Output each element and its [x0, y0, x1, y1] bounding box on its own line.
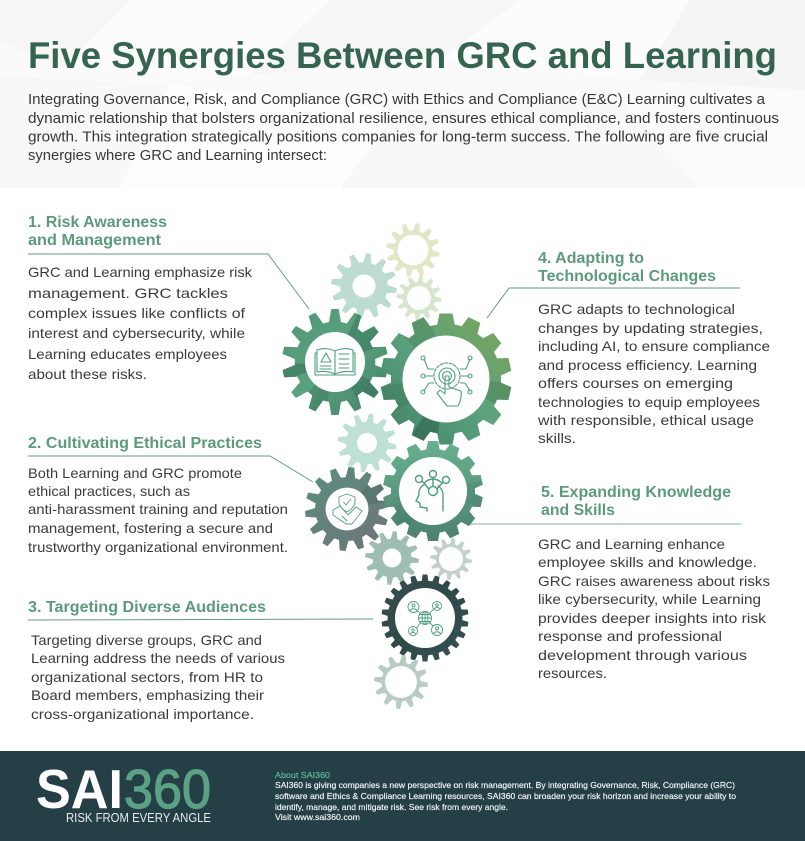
heading 1: and Management	[28, 232, 161, 249]
body 5: GRC and Learning enhance	[538, 536, 725, 552]
body 3: Targeting diverse groups, GRC and	[31, 632, 262, 648]
heading 2: 2. Cultivating Ethical Practices	[28, 435, 262, 452]
body 1: GRC and Learning emphasize risk	[28, 264, 253, 280]
body 4: technologies to equip employees	[538, 394, 760, 410]
body 2: management, fostering a secure and	[28, 520, 273, 536]
heading 5: 5. Expanding Knowledge	[541, 484, 731, 501]
body 5: provides deeper insights into risk	[538, 610, 767, 626]
heading 4: 4. Adapting to	[538, 250, 644, 267]
body 1: complex issues like conflicts of	[28, 305, 245, 321]
body 2: ethical practices, such as	[28, 483, 190, 499]
about text: Visit www.sai360.com	[275, 813, 360, 822]
about text: About SAI360	[275, 771, 330, 780]
body 2: trustworthy organizational environment.	[28, 539, 288, 555]
connector 2	[28, 456, 313, 482]
logo: RISK FROM EVERY ANGLE	[66, 811, 211, 825]
body 5	[538, 536, 770, 681]
panel: 1 risk awareness	[28, 214, 309, 382]
connector 3	[28, 619, 373, 620]
icon: head with network	[416, 470, 450, 511]
connector 1	[28, 254, 309, 309]
intro text: Integrating Governance, Risk, and Compliance (GRC) with Ethics and Compliance (E&C) Learning cultivates a	[28, 92, 766, 108]
gear: pale green small	[396, 276, 442, 320]
gear: pale teal middle	[338, 414, 396, 472]
body 1: about these risks.	[28, 366, 147, 382]
heading 4: Technological Changes	[538, 268, 716, 285]
body 3: cross-organizational importance.	[31, 706, 254, 722]
gear: pale yellow top	[386, 223, 440, 277]
gear: bottom pale	[374, 655, 428, 709]
title: Five Synergies Between GRC and Learning	[28, 35, 777, 76]
body 1: interest and cybersecurity, while	[28, 325, 245, 341]
body 3: Board members, emphasizing their	[31, 687, 264, 703]
body 3	[31, 632, 285, 722]
gear: head	[383, 441, 483, 541]
gear cluster	[277, 216, 518, 715]
body 5: development through various	[538, 647, 747, 663]
body 4: GRC adapts to technological	[538, 301, 735, 317]
body 4: and process efficiency. Learning	[538, 357, 757, 373]
logo: 360	[124, 758, 211, 820]
heading 5: and Skills	[541, 502, 615, 519]
gear: dark network	[382, 574, 468, 662]
intro text: growth. This integration strategically positions companies for long-term success. The following are five crucial	[28, 130, 768, 146]
gear: pale teal top	[331, 253, 397, 319]
connector 5	[469, 523, 741, 525]
about text: identify, manage, and mitigate risk. See risk from every angle.	[275, 803, 508, 812]
gear: book	[282, 309, 388, 415]
body 3: Learning address the needs of various	[31, 650, 285, 666]
heading 4	[538, 250, 716, 285]
heading 3: 3. Targeting Diverse Audiences	[28, 599, 266, 616]
gear: light grey	[430, 538, 472, 580]
icon: book with warning	[315, 349, 355, 375]
body 5: like cybersecurity, while Learning	[538, 591, 761, 607]
body 3: organizational sectors, from HR to	[31, 669, 263, 685]
body 5: response and professional	[538, 628, 722, 644]
body 4	[537, 301, 770, 446]
body 1	[28, 264, 253, 382]
body 2	[28, 465, 288, 555]
gear: shield handshake	[305, 467, 389, 551]
heading 5	[541, 484, 731, 519]
body 4: changes by updating strategies,	[538, 320, 763, 336]
body 4: skills.	[538, 430, 576, 446]
intro text: dynamic relationship that bolsters organizational resilience, ensures ethical compliance, and fosters continuous	[28, 111, 779, 127]
header background	[0, 0, 805, 188]
about text	[275, 771, 736, 822]
intro text	[28, 92, 779, 164]
about text: SAI360 is giving companies a new perspective on risk management. By integrating Governance, Risk, Compliance (GRC)	[275, 781, 735, 790]
gear: technology	[380, 314, 512, 444]
intro text: synergies where GRC and Learning intersect:	[28, 148, 327, 164]
body 4: with responsible, ethical usage	[537, 412, 754, 428]
panel: 2 ethical practices	[28, 435, 313, 555]
icon: global network of people	[408, 602, 442, 636]
body 1: Learning educates employees	[28, 346, 227, 362]
gear: mid grey-green	[365, 531, 419, 585]
body 2: Both Learning and GRC promote	[28, 465, 242, 481]
panel: 5 knowledge and skills	[469, 484, 770, 681]
heading 1: 1. Risk Awareness	[28, 214, 167, 231]
footer	[0, 751, 805, 841]
body 4: including AI, to ensure compliance	[538, 338, 770, 354]
body 2: anti-harassment training and reputation	[28, 501, 288, 517]
panel: 4 technological changes	[487, 250, 770, 446]
body 1: management. GRC tackles	[28, 285, 228, 301]
body 5: resources.	[538, 665, 607, 681]
logo	[36, 758, 211, 825]
heading 1	[28, 214, 167, 249]
body 4: offers courses on emerging	[538, 375, 733, 391]
body 5: GRC raises awareness about risks	[538, 573, 770, 589]
icon: shield and handshake	[333, 494, 362, 524]
panel: 3 diverse audiences	[28, 599, 373, 722]
connector 4	[487, 288, 740, 318]
logo: SAI	[36, 758, 123, 820]
about text: software and Ethics & Compliance Learning resources, SAI360 can broaden your risk horizon and increase your ability to	[275, 792, 736, 801]
body 5: employee skills and knowledge.	[538, 554, 757, 570]
icon: touch technology	[421, 356, 472, 406]
